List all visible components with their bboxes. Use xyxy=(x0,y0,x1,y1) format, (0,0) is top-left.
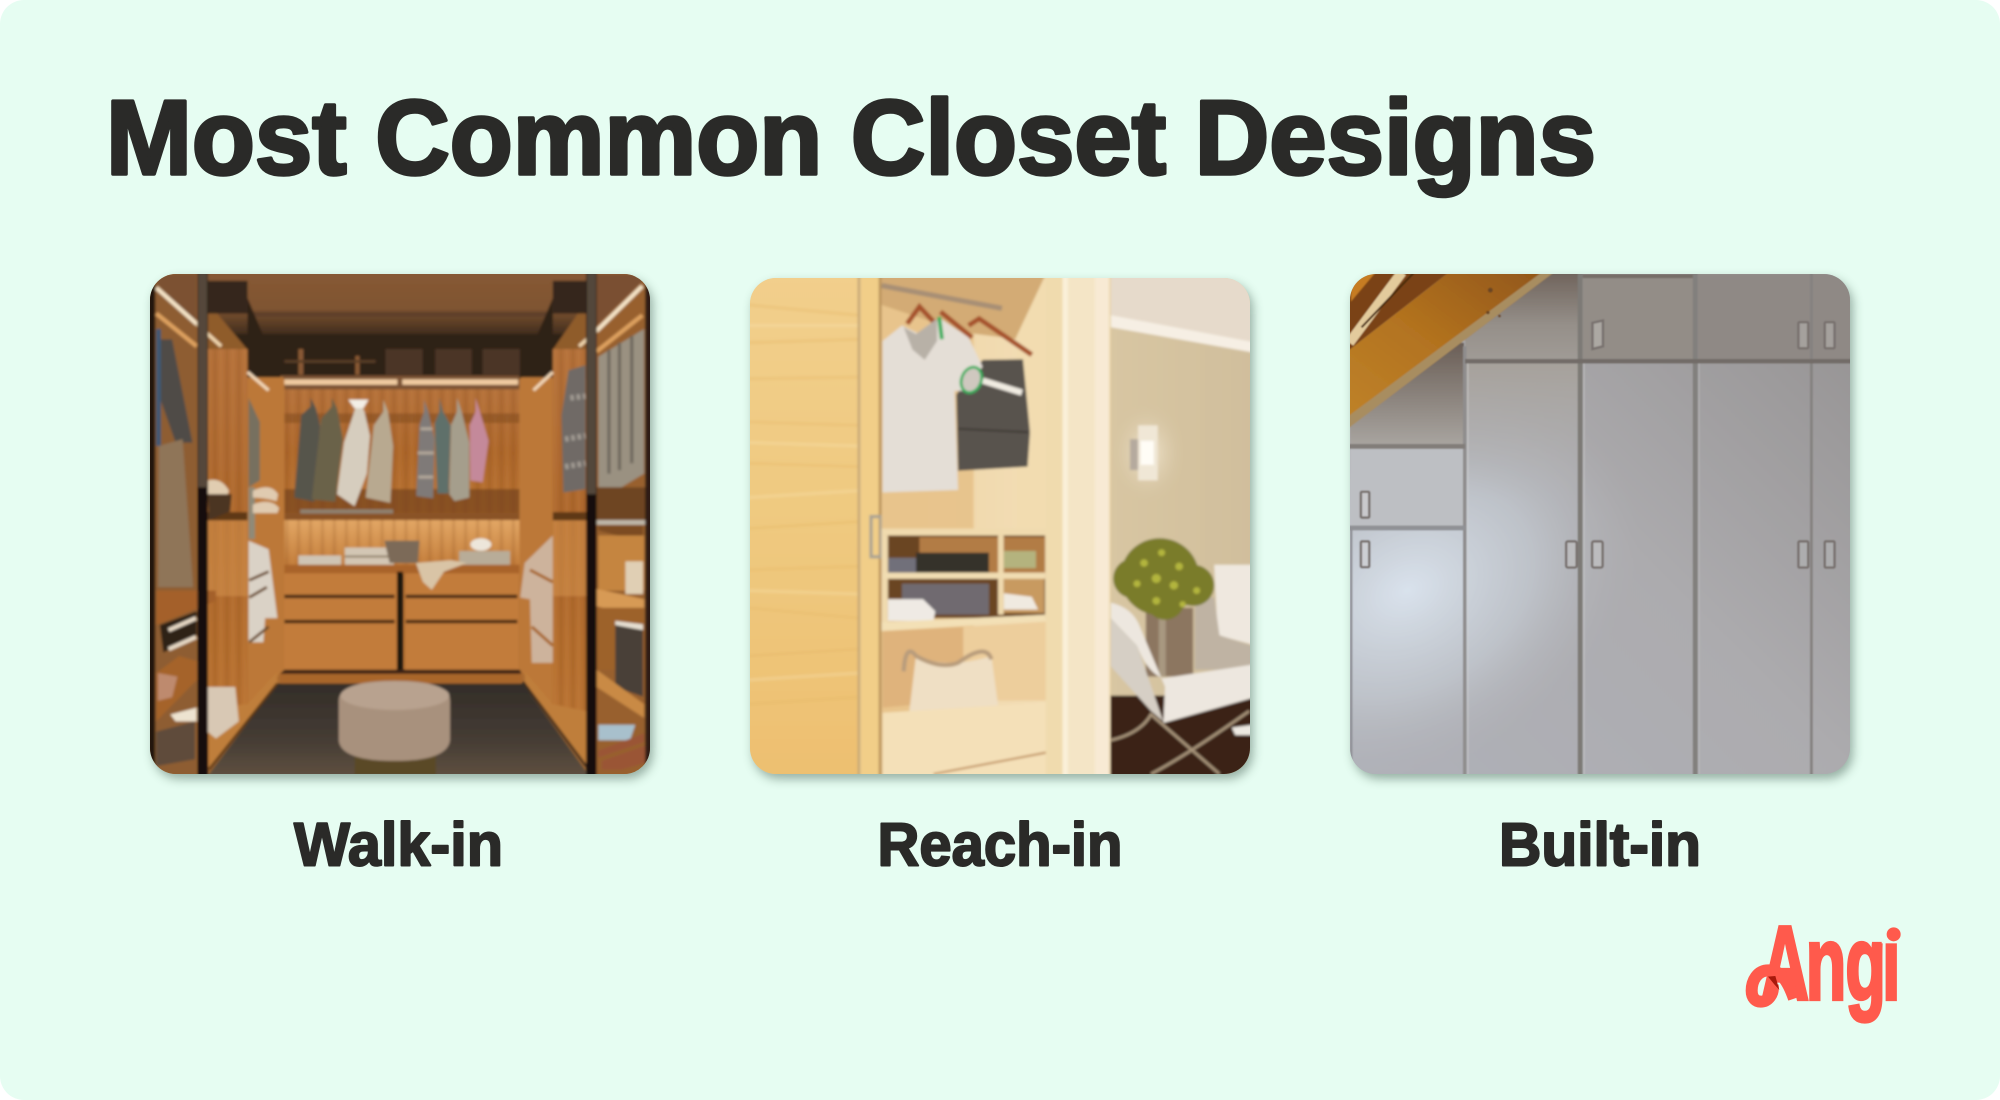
panel lines vertical xyxy=(1463,346,1466,780)
upper doors xyxy=(1465,363,1579,501)
white polo xyxy=(883,319,983,492)
right compartment xyxy=(597,267,656,780)
plant xyxy=(1146,608,1193,677)
bag xyxy=(909,656,998,714)
rod jackets xyxy=(294,398,489,506)
panel: reach-in closet photo xyxy=(750,278,1250,774)
ottoman xyxy=(355,754,436,775)
side clothes near back xyxy=(249,398,260,487)
title: Most Common Closet Designs xyxy=(106,79,1596,197)
logo: Angi: Angi xyxy=(1761,904,1901,1022)
interior xyxy=(882,270,1064,783)
rear sofa xyxy=(1214,565,1256,646)
door handle xyxy=(871,517,881,557)
shelf unit xyxy=(882,529,1046,535)
chair xyxy=(1111,603,1253,723)
room beyond xyxy=(1111,270,1258,783)
lower compartment xyxy=(883,627,963,708)
ceiling xyxy=(200,267,597,336)
glass edge dark frames xyxy=(197,267,208,780)
panel: built-in closet photo xyxy=(1350,274,1850,774)
panel lines horizontal xyxy=(1465,359,1855,363)
cabinet base xyxy=(1341,267,1860,783)
handles xyxy=(1361,320,1835,568)
left compartment xyxy=(144,267,197,780)
pillar xyxy=(1046,270,1063,783)
roof beam xyxy=(1341,271,1556,434)
label: built-in: Built-in xyxy=(1499,810,1701,878)
floor xyxy=(207,683,590,776)
folded items on counter xyxy=(298,555,341,566)
hangers xyxy=(907,307,1032,355)
wall lamp xyxy=(1109,401,1186,504)
drawer xyxy=(883,702,1048,783)
floor xyxy=(1111,696,1258,785)
dark clothes xyxy=(956,359,1030,471)
back wall xyxy=(281,389,519,515)
counter and drawers xyxy=(280,565,521,573)
panel: walk-in closet photo xyxy=(150,274,650,774)
label: walk-in: Walk-in xyxy=(294,810,503,878)
side walls xyxy=(248,350,284,704)
door xyxy=(741,270,860,783)
label: reach-in: Reach-in xyxy=(878,810,1122,878)
